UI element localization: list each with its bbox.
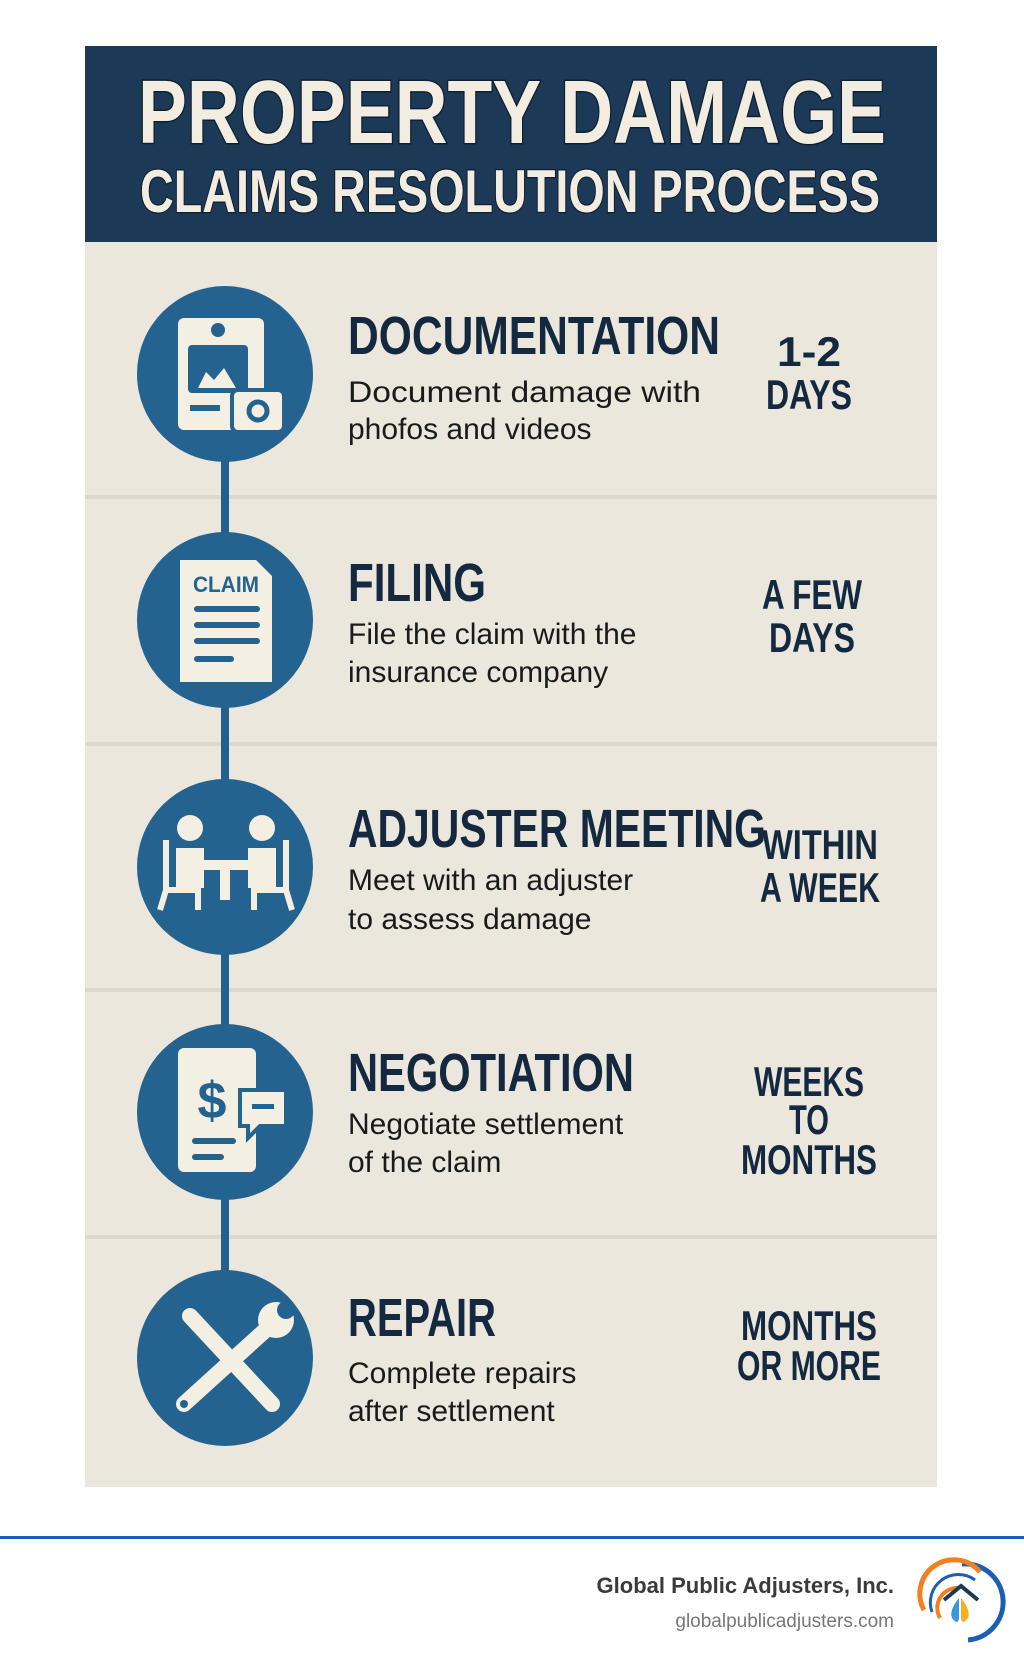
icon: dollar document with chat: $ — [198, 1072, 227, 1130]
footer divider — [0, 1536, 1024, 1539]
description: after settlement — [348, 1395, 555, 1428]
duration: A FEW — [762, 571, 862, 618]
icon: company logo — [920, 1560, 1003, 1640]
footer: company: globalpublicadjusters.com — [675, 1611, 894, 1632]
step 1: documentation — [137, 286, 852, 462]
icon: two people at table — [137, 779, 313, 955]
description: Negotiate settlement — [348, 1108, 624, 1141]
duration: TO — [789, 1096, 829, 1143]
icon: claim document: CLAIM — [193, 572, 259, 597]
footer: company: Global Public Adjusters, Inc. — [597, 1573, 894, 1598]
title: DOCUMENTATION — [348, 306, 720, 366]
timeline connector — [221, 374, 229, 1358]
icon: dollar document with chat — [137, 1024, 313, 1200]
icon: wrench and screwdriver — [137, 1270, 313, 1446]
description: insurance company — [348, 656, 608, 689]
panel: background — [85, 242, 937, 1487]
step 5: repair — [137, 1270, 881, 1446]
duration: WEEKS — [754, 1058, 864, 1105]
icon: photo camera — [137, 286, 313, 462]
description: Meet with an adjuster — [348, 864, 633, 897]
duration: A WEEK — [760, 864, 880, 911]
duration: DAYS — [766, 371, 852, 418]
duration: MONTHS — [741, 1302, 877, 1349]
description: Complete repairs — [348, 1357, 576, 1390]
duration: DAYS — [769, 614, 855, 661]
title: FILING — [348, 553, 486, 613]
step 3: adjuster meeting — [137, 779, 880, 955]
title: NEGOTIATION — [348, 1043, 634, 1103]
title: REPAIR — [348, 1288, 496, 1348]
description: phofos and videos — [348, 413, 592, 446]
duration: 1-2 — [777, 328, 841, 375]
description: to assess damage — [348, 903, 591, 936]
footer: company — [597, 1573, 894, 1632]
description: Document damage with — [348, 376, 701, 409]
duration: OR MORE — [737, 1342, 881, 1389]
title: ADJUSTER MEETING — [348, 799, 766, 859]
header — [85, 46, 937, 242]
step 4: negotiation — [137, 1024, 877, 1200]
duration: MONTHS — [741, 1136, 877, 1183]
step 2: filing — [137, 532, 862, 708]
description: File the claim with the — [348, 618, 636, 651]
description: of the claim — [348, 1146, 501, 1179]
duration: WITHIN — [762, 821, 878, 868]
icon: claim document — [137, 532, 313, 708]
